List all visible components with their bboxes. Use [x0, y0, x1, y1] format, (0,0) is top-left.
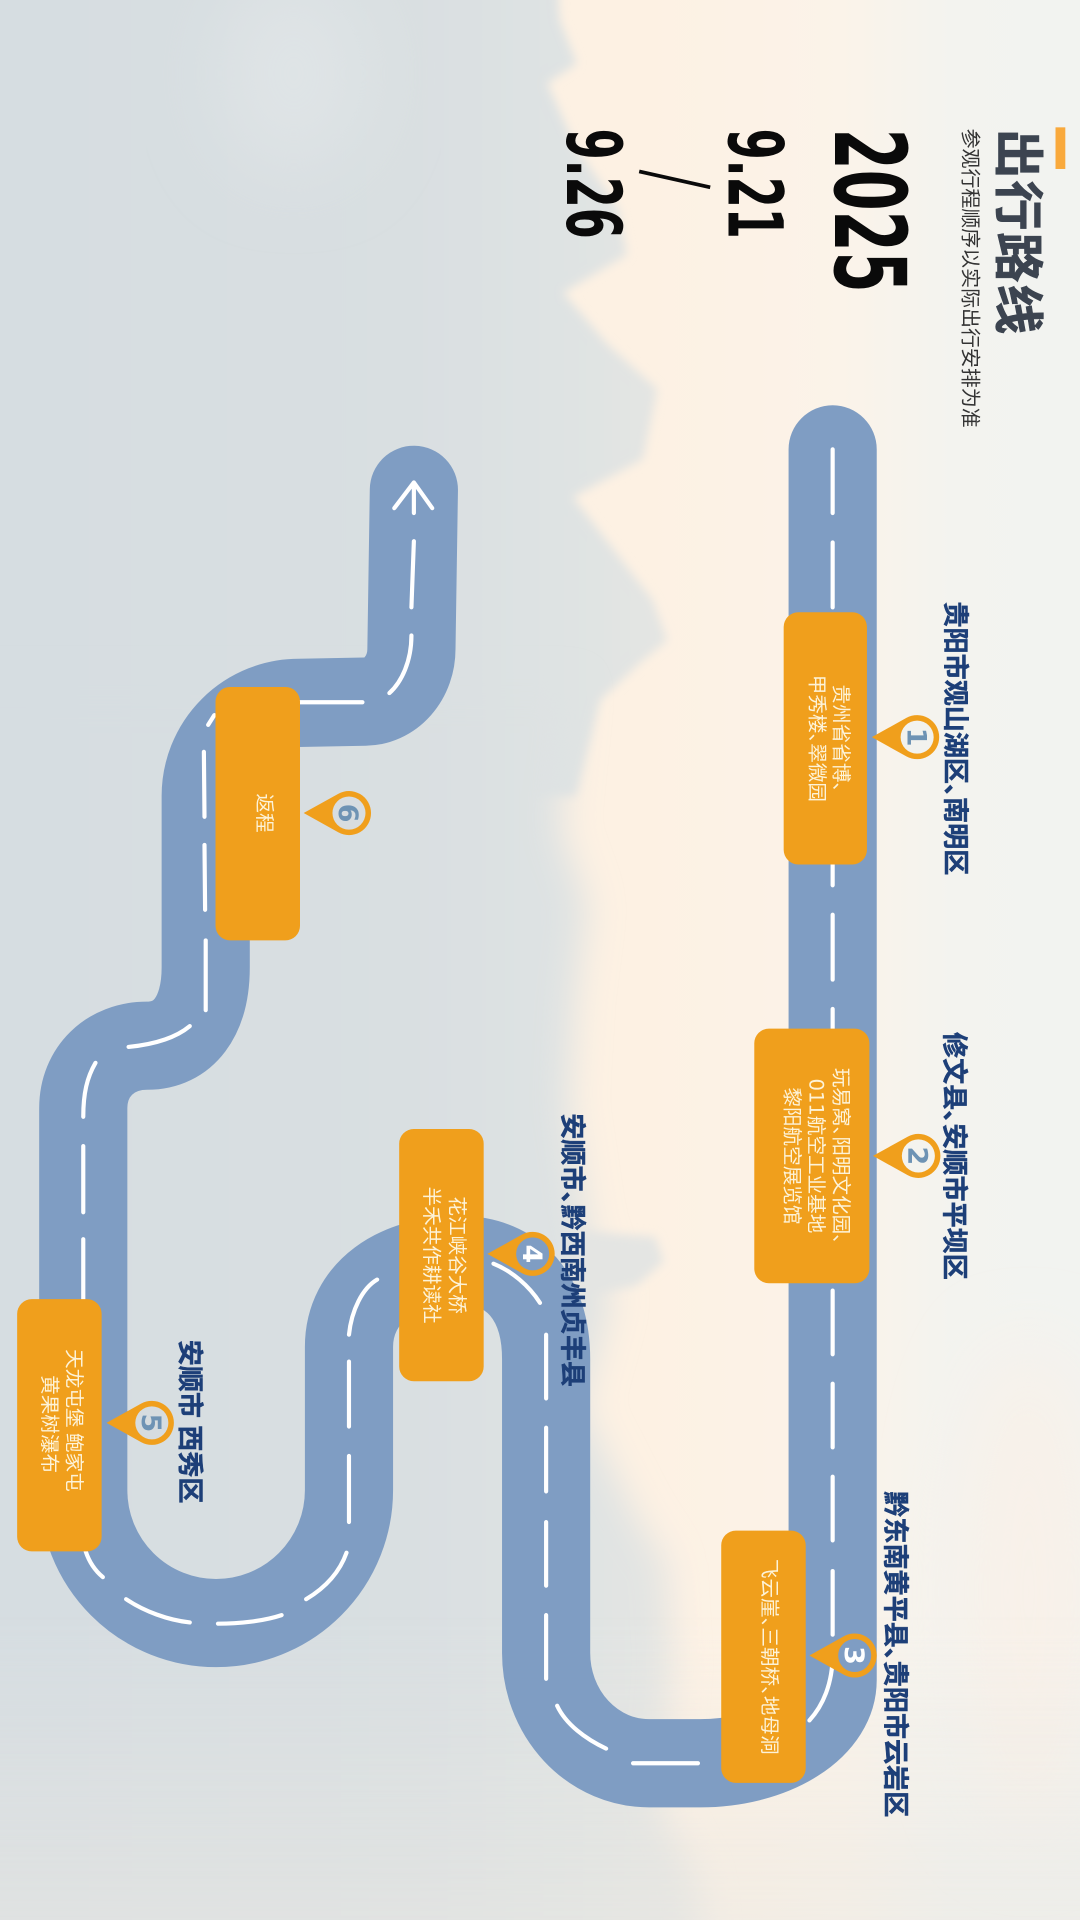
stop 6 — [216, 687, 371, 940]
stop 5 — [17, 1299, 205, 1551]
stop 1 location: 贵阳市观山湖区、南明区 — [941, 601, 971, 875]
icon: road end arrow — [394, 482, 432, 513]
stop 2 — [754, 1029, 969, 1283]
stop 2 card text — [781, 1068, 851, 1244]
year: 2025 — [811, 129, 926, 293]
road centre dashes — [83, 449, 833, 1763]
start date: 9.21 — [711, 129, 799, 239]
stop 2 pin — [873, 1134, 940, 1178]
end date: 9.26 — [549, 129, 637, 239]
stop 1 card text: 甲秀楼、翠微园 — [806, 675, 828, 802]
stop 3 card — [721, 1531, 806, 1783]
stop 1 card text — [806, 675, 851, 802]
stop 3 — [721, 1491, 911, 1817]
stop 5 card text: 天龙屯堡 鲍家屯 — [62, 1349, 84, 1492]
stop 6 pin: 6 — [332, 804, 363, 822]
stop 5 location: 安顺市 西秀区 — [175, 1340, 205, 1503]
stop 6 card text: 返程 — [253, 793, 275, 833]
stop 4 — [399, 1113, 587, 1387]
stop 1 pin: 1 — [900, 728, 931, 747]
stop 4 card text: 半禾共作耕读社 — [420, 1187, 442, 1324]
subtitle: 参观行程顺序以实际出行安排为准 — [959, 129, 982, 428]
stop 1 pin — [872, 715, 939, 759]
stop 6 pin — [304, 791, 371, 835]
stop 5 card — [17, 1299, 102, 1551]
stop 5 pin — [107, 1401, 174, 1445]
stop 5 pin: 5 — [135, 1413, 166, 1432]
title heading — [989, 127, 1065, 334]
stop 3 pin — [809, 1633, 877, 1678]
stop 6 card — [216, 687, 300, 940]
stop 2 card text: 黎阳航空展览馆 — [781, 1087, 803, 1224]
stop 4 card text — [420, 1187, 468, 1324]
stop 3 card text: 飞云崖、三朝桥、地母洞 — [758, 1559, 780, 1755]
stop 5 card text: 黄果树瀑布 — [38, 1375, 60, 1473]
title accent bar — [1056, 127, 1065, 169]
stop 1 card — [784, 612, 867, 864]
stop 2 location: 修文县、安顺市平坝区 — [939, 1032, 969, 1280]
date slash — [639, 171, 710, 187]
title text: 出行路线 — [989, 129, 1045, 334]
stop 5 card text — [38, 1349, 84, 1492]
stop 2 card text: 玩易窝、阳明文化园、 — [829, 1068, 851, 1244]
stop 4 pin: 4 — [516, 1245, 547, 1263]
stop 4 pin — [487, 1232, 555, 1276]
stop 4 card text: 花江峡谷大桥 — [446, 1196, 468, 1314]
stop 4 card — [399, 1129, 484, 1381]
stop 2 card text: 011 航空工业基地 — [804, 1078, 827, 1233]
stop 1 — [784, 601, 971, 875]
stop 1 card text: 贵州省省博、 — [829, 685, 851, 792]
stop 2 card — [754, 1029, 869, 1283]
stop 4 location: 安顺市、黔西南州贞丰县 — [557, 1113, 587, 1387]
date block — [549, 129, 926, 293]
road — [83, 449, 833, 1763]
stop 2 pin: 2 — [902, 1147, 933, 1165]
stop 3 location: 黔东南黄平县、贵阳市云岩区 — [881, 1491, 911, 1817]
stop 3 pin: 3 — [838, 1646, 869, 1665]
